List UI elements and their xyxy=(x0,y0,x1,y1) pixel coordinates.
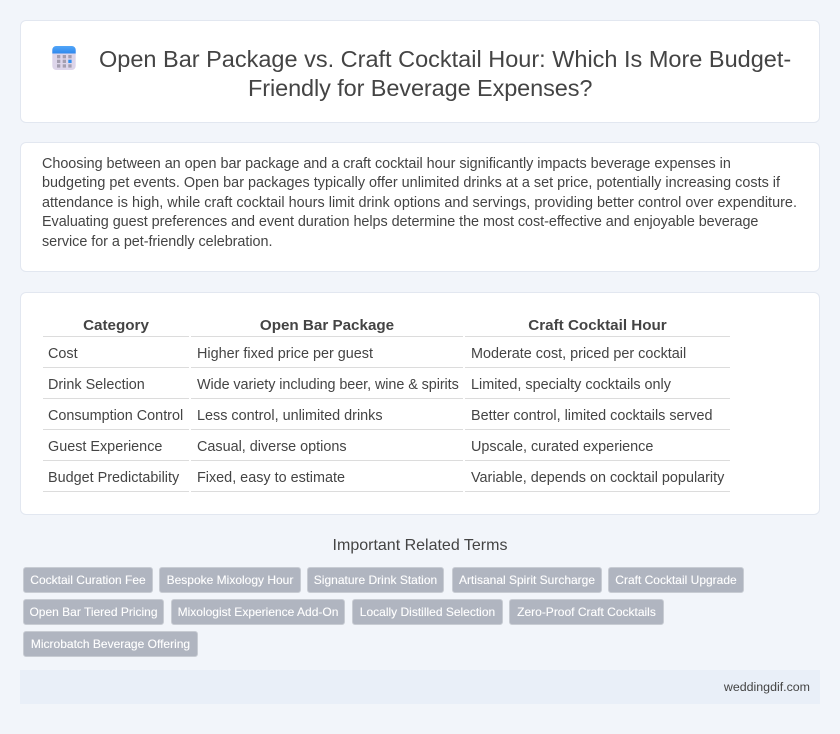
related terms tags: Mixologist Experience Add-On xyxy=(178,605,338,619)
comparison table: Higher fixed price per guest xyxy=(197,346,373,362)
comparison table: Casual, diverse options xyxy=(197,439,347,455)
comparison table: Cost xyxy=(48,346,78,362)
related terms tags: Microbatch Beverage Offering xyxy=(31,637,190,651)
related terms tags xyxy=(23,567,744,657)
intro card xyxy=(20,142,820,272)
comparison table: Moderate cost, priced per cocktail xyxy=(471,346,686,362)
intro text: attendance is high, while craft cocktail hours limit drink options and servings, providing better control over expenditure. xyxy=(42,195,797,211)
comparison table: Wide variety including beer, wine & spirits xyxy=(197,377,459,393)
comparison table: Drink Selection xyxy=(48,377,145,393)
title xyxy=(99,46,791,101)
comparison table: Limited, specialty cocktails only xyxy=(471,377,671,393)
comparison table: Variable, depends on cocktail popularity xyxy=(471,470,724,486)
comparison table: Category xyxy=(83,317,149,334)
comparison table: Guest Experience xyxy=(48,439,162,455)
related terms tags: Cocktail Curation Fee xyxy=(30,573,146,587)
intro text: Evaluating guest preferences and event duration helps determine the most cost-effective and enjoyable beverage xyxy=(42,214,758,230)
comparison table: Open Bar Package xyxy=(260,317,394,334)
icon: calendar xyxy=(52,46,76,70)
title: Friendly for Beverage Expenses? xyxy=(248,75,592,101)
related terms tags: Bespoke Mixology Hour xyxy=(167,573,293,587)
related terms tags: Locally Distilled Selection xyxy=(360,605,495,619)
title: Open Bar Package vs. Craft Cocktail Hour: Which Is More Budget- xyxy=(99,46,791,72)
related terms heading: Important Related Terms xyxy=(333,537,507,554)
intro text: service for a pet-friendly celebration. xyxy=(42,234,272,250)
footer source: weddingdif.com xyxy=(724,680,810,694)
related terms tags: Zero-Proof Craft Cocktails xyxy=(517,605,656,619)
related terms tags: Signature Drink Station xyxy=(314,573,437,587)
footer bar xyxy=(20,670,820,704)
comparison table: Less control, unlimited drinks xyxy=(197,408,383,424)
intro text: Choosing between an open bar package and a craft cocktail hour significantly impacts beverage expenses in xyxy=(42,156,731,172)
comparison table: Craft Cocktail Hour xyxy=(528,317,667,334)
comparison table: Consumption Control xyxy=(48,408,183,424)
intro text: budgeting pet events. Open bar packages typically offer unlimited drinks at a set price, potentially increasing costs if xyxy=(42,175,780,191)
intro text xyxy=(42,156,797,250)
comparison table: Upscale, curated experience xyxy=(471,439,653,455)
header card xyxy=(20,20,820,123)
related terms tags: Craft Cocktail Upgrade xyxy=(615,573,737,587)
comparison table: Budget Predictability xyxy=(48,470,179,486)
comparison table xyxy=(43,317,730,492)
related terms tags: Artisanal Spirit Surcharge xyxy=(459,573,595,587)
comparison table: Better control, limited cocktails served xyxy=(471,408,713,424)
related terms tags: Open Bar Tiered Pricing xyxy=(29,605,158,619)
comparison table card xyxy=(20,292,820,515)
comparison table: Fixed, easy to estimate xyxy=(197,470,345,486)
